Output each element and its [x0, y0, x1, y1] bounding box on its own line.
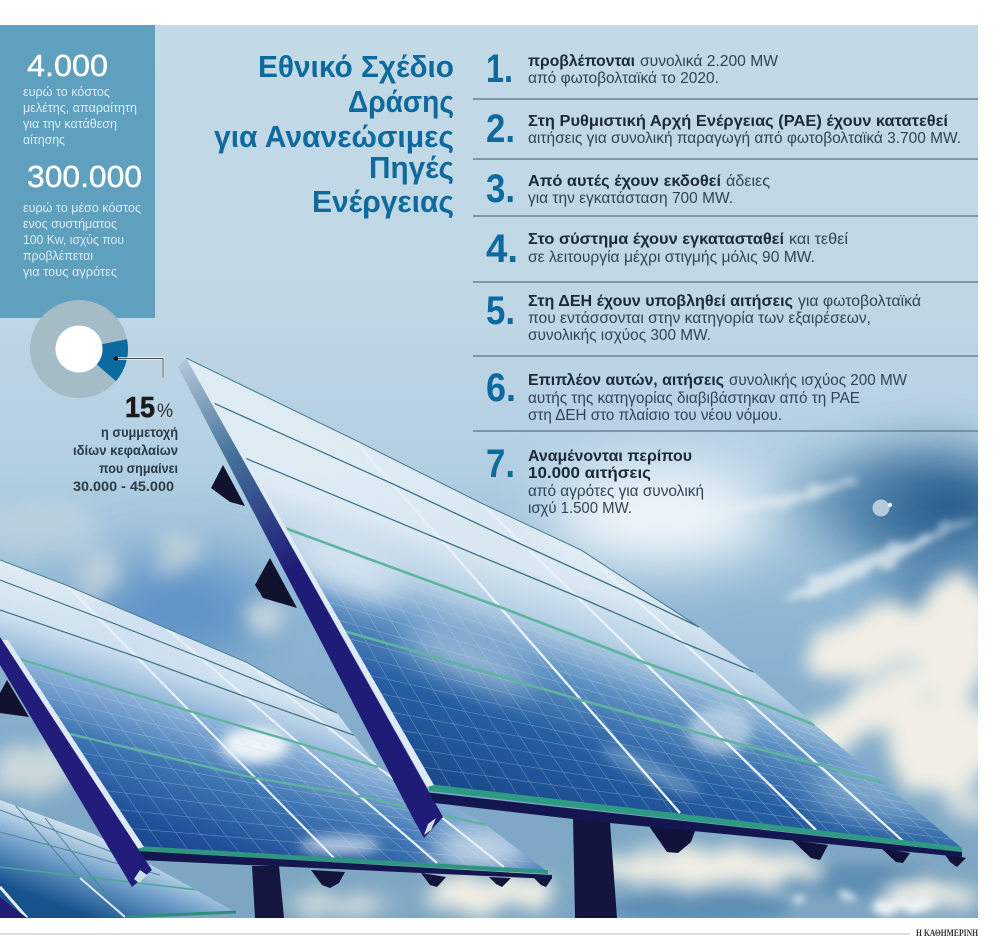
item 2: αιτήσεις για συνολική παραγωγή από φωτοβολταϊκά 3.700 MW.: [528, 130, 961, 147]
donut chart: 15%: [30, 300, 128, 398]
text: system cost: προβλέπεται: [23, 248, 93, 263]
item 5: για φωτοβολταϊκά: [798, 293, 921, 310]
item 4: [486, 227, 849, 271]
text: own capital: ιδίων κεφαλαίων: [73, 442, 178, 458]
reflections and cell grid: [209, 401, 952, 845]
item 5: 5.: [486, 289, 515, 333]
figure: 15%: 15: [125, 392, 155, 424]
title: Πηγές: [369, 151, 454, 185]
item 6: 6.: [486, 366, 516, 410]
item 2: Στη Ρυθμιστική Αρχή Ενέργειας (ΡΑΕ) έχουν κατατεθεί: [528, 113, 948, 130]
title: Ενέργειας: [312, 185, 454, 219]
item 5: συνολικής ισχύος 300 MW.: [528, 327, 711, 344]
item 7: [486, 442, 704, 517]
text: own capital: η συμμετοχή: [101, 424, 178, 440]
panel surface: [186, 358, 962, 848]
figure: 4.000: 4.000: [27, 48, 108, 83]
white rim: [0, 640, 144, 849]
second solar panel: [0, 560, 552, 918]
green bottom bar: [429, 784, 962, 852]
text: system cost: 100 Kw, ισχύς που: [23, 232, 124, 247]
left bracket: [0, 680, 29, 717]
under-brackets: [649, 826, 966, 867]
figure: 15%: [125, 392, 173, 424]
text: system cost: ενος συστήματος: [23, 216, 117, 231]
footer credit: Η ΚΑΘΗΜΕΡΙΝΗ: [916, 929, 978, 939]
deeper blue sky areas: [90, 457, 1000, 924]
white rim: [186, 358, 434, 787]
text: system cost: για τους αγρότες: [23, 264, 117, 279]
beam: [139, 851, 552, 879]
item 1: 1.: [486, 47, 513, 91]
item 7: 10.000 αιτήσεις: [528, 465, 651, 482]
figure: 300.000: 300.000: [27, 159, 142, 194]
item 7: ισχύ 1.500 MW.: [528, 500, 632, 517]
bright sun glow behind the panel: [550, 467, 770, 563]
title: Εθνικό Σχέδιο: [258, 50, 454, 84]
item 1: από φωτοβολταϊκά το 2020.: [528, 70, 719, 87]
under-brackets: [311, 870, 552, 888]
title: Δράσης: [348, 85, 454, 119]
green bottom bar: [137, 846, 548, 874]
item 6: Επιπλέον αυτών, αιτήσεις: [528, 372, 724, 389]
text: system cost: [23, 200, 141, 279]
item 6: αυτής της κατηγορίας διαβιβάστηκαν από τη ΡΑΕ: [528, 390, 860, 407]
item 7: Αναμένονται περίπου: [528, 448, 692, 465]
item 6: στη ΔΕΗ στο πλαίσιο του νέου νόμου.: [528, 407, 782, 424]
item 1: συνολικά 2.200 MW: [640, 53, 778, 70]
text: study cost: αίτησης: [23, 132, 65, 147]
item 3: 3.: [486, 167, 515, 211]
top edge: [0, 560, 337, 713]
main post: [573, 818, 617, 918]
text: study cost: ευρώ το κόστος: [23, 84, 110, 99]
item 6: συνολικής ισχύος 200 MW: [729, 372, 907, 389]
text: system cost: ευρώ το μέσο κόστος: [23, 200, 141, 215]
panel surface: [0, 560, 548, 872]
clouds: [0, 500, 1000, 917]
item 1: [486, 47, 778, 91]
item 5: [486, 289, 921, 344]
title: [214, 50, 454, 219]
top edge: [186, 358, 699, 627]
left brackets: [211, 465, 297, 608]
item 5: που εντάσσονται στην κατηγορία των εξαιρέσεων,: [528, 310, 871, 327]
lens flare: [872, 500, 892, 516]
figure: 15%: %: [157, 401, 173, 422]
beam: [424, 792, 962, 857]
item 4: Στο σύστημα έχουν εγκατασταθεί: [528, 231, 784, 248]
post of second panel: [252, 866, 284, 918]
text: own capital: [73, 424, 178, 494]
navy rail: [178, 358, 443, 838]
item 7: 7.: [486, 442, 515, 486]
title: για Ανανεώσιμες: [214, 120, 454, 154]
navy rail: [0, 637, 152, 887]
item 6: [486, 366, 907, 424]
dividers: [473, 99, 978, 431]
third solar panel, bottom left: [0, 800, 237, 918]
item 4: σε λειτουργία μέχρι στιγμής μόλις 90 MW.: [528, 249, 815, 266]
item 4: 4.: [486, 227, 518, 271]
panel: costs: [0, 25, 155, 318]
footer rule: [0, 933, 910, 935]
cell grid and reflections: [0, 580, 531, 872]
item 3: για την εγκατάσταση 700 MW.: [528, 190, 733, 207]
text: study cost: για την κατάθεση: [23, 116, 117, 131]
leader line: [114, 356, 163, 378]
item 4: και τεθεί: [789, 231, 849, 248]
item 1: προβλέπονται: [528, 53, 635, 70]
main solar panel: [178, 358, 966, 867]
item 2: [486, 107, 961, 151]
text: own capital: 30.000 - 45.000: [73, 478, 174, 494]
item 2: 2.: [486, 107, 515, 151]
text: study cost: μελέτης, απαραίτητη: [23, 100, 137, 115]
item 3: Από αυτές έχουν εκδοθεί: [528, 173, 721, 190]
item 3: [486, 167, 770, 211]
item 7: από αγρότες για συνολική: [528, 483, 704, 500]
item 5: Στη ΔΕΗ έχουν υποβληθεί αιτήσεις: [528, 293, 793, 310]
text: study cost: [23, 84, 137, 147]
cloud streaks: [720, 474, 979, 913]
item 3: άδειες: [726, 173, 770, 190]
text: own capital: που σημαίνει: [99, 460, 178, 476]
